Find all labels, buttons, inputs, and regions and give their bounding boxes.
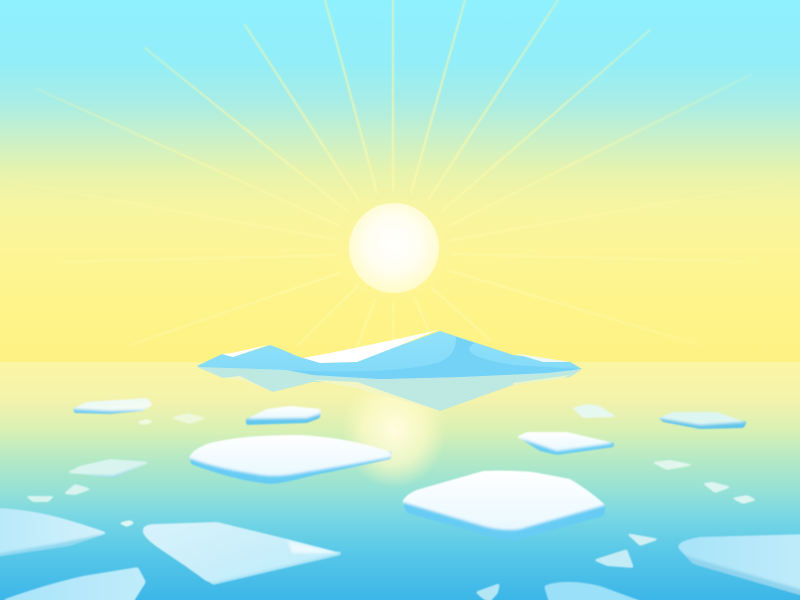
ice floe: bottom left bbox=[0, 567, 146, 600]
ice floe: large centre-right bbox=[402, 471, 606, 540]
sun bbox=[336, 190, 452, 306]
ice floe: large centre-left bbox=[189, 435, 392, 484]
ice floe: lower left edge bbox=[0, 508, 108, 557]
ice chips: left mid bbox=[25, 484, 135, 527]
ice floe: upper centre-left bbox=[246, 406, 321, 425]
ice floe: bottom centre-right bbox=[544, 582, 655, 600]
sun rays bbox=[0, 0, 800, 345]
iceberg bbox=[197, 330, 582, 379]
ice floe: far right bbox=[658, 412, 747, 429]
sun reflection on water bbox=[342, 372, 446, 488]
iceberg reflection bbox=[197, 365, 581, 411]
sea background bbox=[0, 362, 800, 600]
ice floe: far left bbox=[72, 398, 153, 414]
sky background bbox=[0, 0, 800, 363]
ice floe: left mid bbox=[66, 459, 151, 478]
ice floe: small chips far left bbox=[136, 413, 207, 425]
ice floe: lower centre-left bbox=[143, 522, 341, 585]
ice floe: mid right bbox=[516, 432, 614, 455]
ice floe: lower right edge bbox=[678, 534, 800, 598]
ice floe: upper right small bbox=[572, 404, 617, 418]
ice chips: right bbox=[475, 460, 757, 600]
